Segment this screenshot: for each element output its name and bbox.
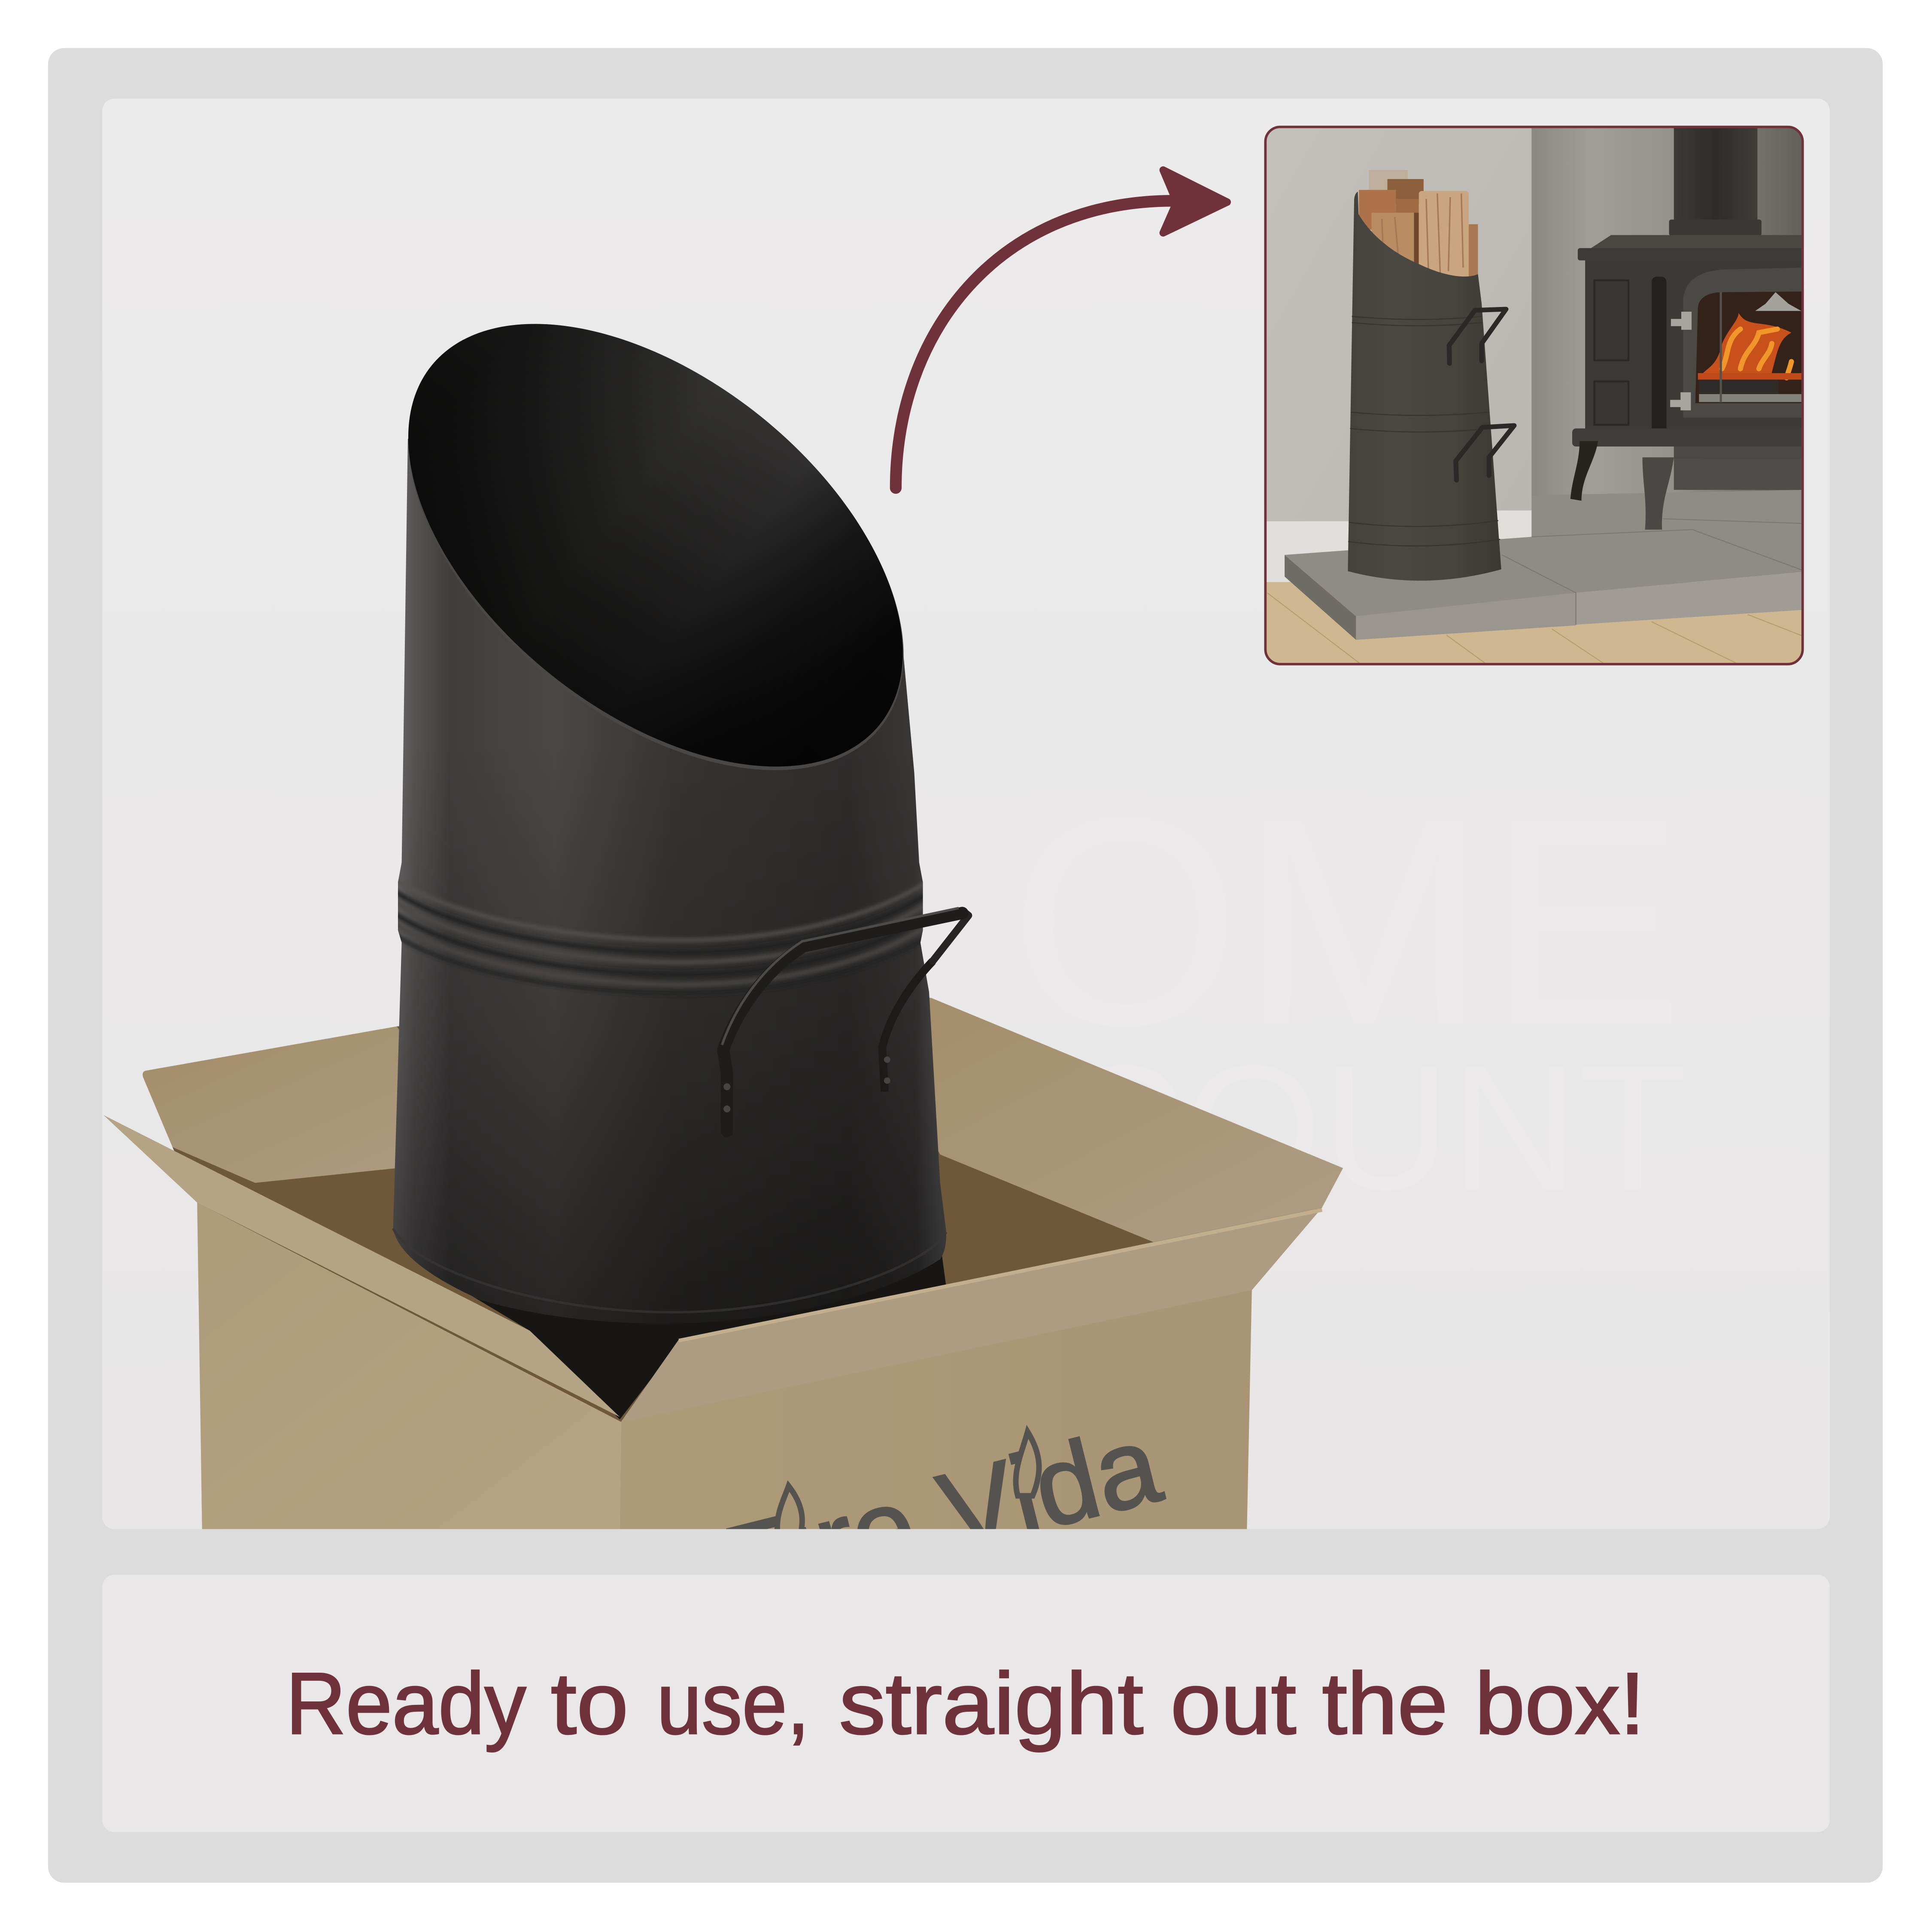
watermark text [690, 756, 1687, 1227]
caption text: the [1322, 1655, 1448, 1753]
watermark text: H [690, 756, 904, 1087]
box right face [620, 1290, 1252, 1529]
box front right flap [621, 1207, 1322, 1422]
inset photo: scuttle in room [1264, 123, 1805, 667]
arrow [896, 170, 1227, 488]
watermark text: DISCOUNT [760, 1028, 1687, 1227]
scuttle bottom rim [393, 1228, 946, 1312]
product in cardboard box [103, 236, 1343, 1628]
logo flames [777, 1432, 1039, 1540]
inset hearth [1285, 490, 1803, 640]
inset wooden floor [1264, 582, 1803, 667]
caption text: box! [1475, 1655, 1645, 1753]
inset fire [1698, 313, 1803, 380]
scuttle ribbed bands [392, 877, 927, 993]
scuttle lower section [407, 1232, 946, 1419]
inset photo border [1265, 127, 1803, 664]
caption text: use, [657, 1655, 810, 1753]
inset skirting board [1264, 510, 1532, 585]
inset alcove wall [1531, 123, 1805, 499]
box front left flap [103, 1115, 620, 1417]
caption text: straight [839, 1655, 1143, 1753]
inset handles [1449, 309, 1514, 480]
panel: caption [102, 1575, 1830, 1832]
scuttle opening [327, 236, 985, 858]
inset wood stove [1571, 123, 1805, 530]
box back right flap [850, 986, 1343, 1242]
flap edge highlight [679, 1210, 1322, 1340]
caption text: Ready [286, 1655, 526, 1753]
inset wall [1264, 123, 1534, 593]
box logo: Fire Vida [713, 1401, 1172, 1628]
scuttle handle [722, 908, 969, 1131]
caption text: out [1170, 1655, 1296, 1753]
inset coal scuttle [1348, 192, 1514, 581]
box back left flap [143, 1027, 493, 1183]
coal scuttle body [392, 439, 946, 1324]
panel: product image [102, 99, 1830, 1529]
watermark text: OME [1010, 756, 1684, 1087]
handle rivets [723, 1057, 890, 1112]
inset logs [1359, 170, 1478, 278]
box left face [197, 1203, 621, 1529]
caption text: to [551, 1655, 629, 1753]
box interior [173, 998, 1322, 1422]
